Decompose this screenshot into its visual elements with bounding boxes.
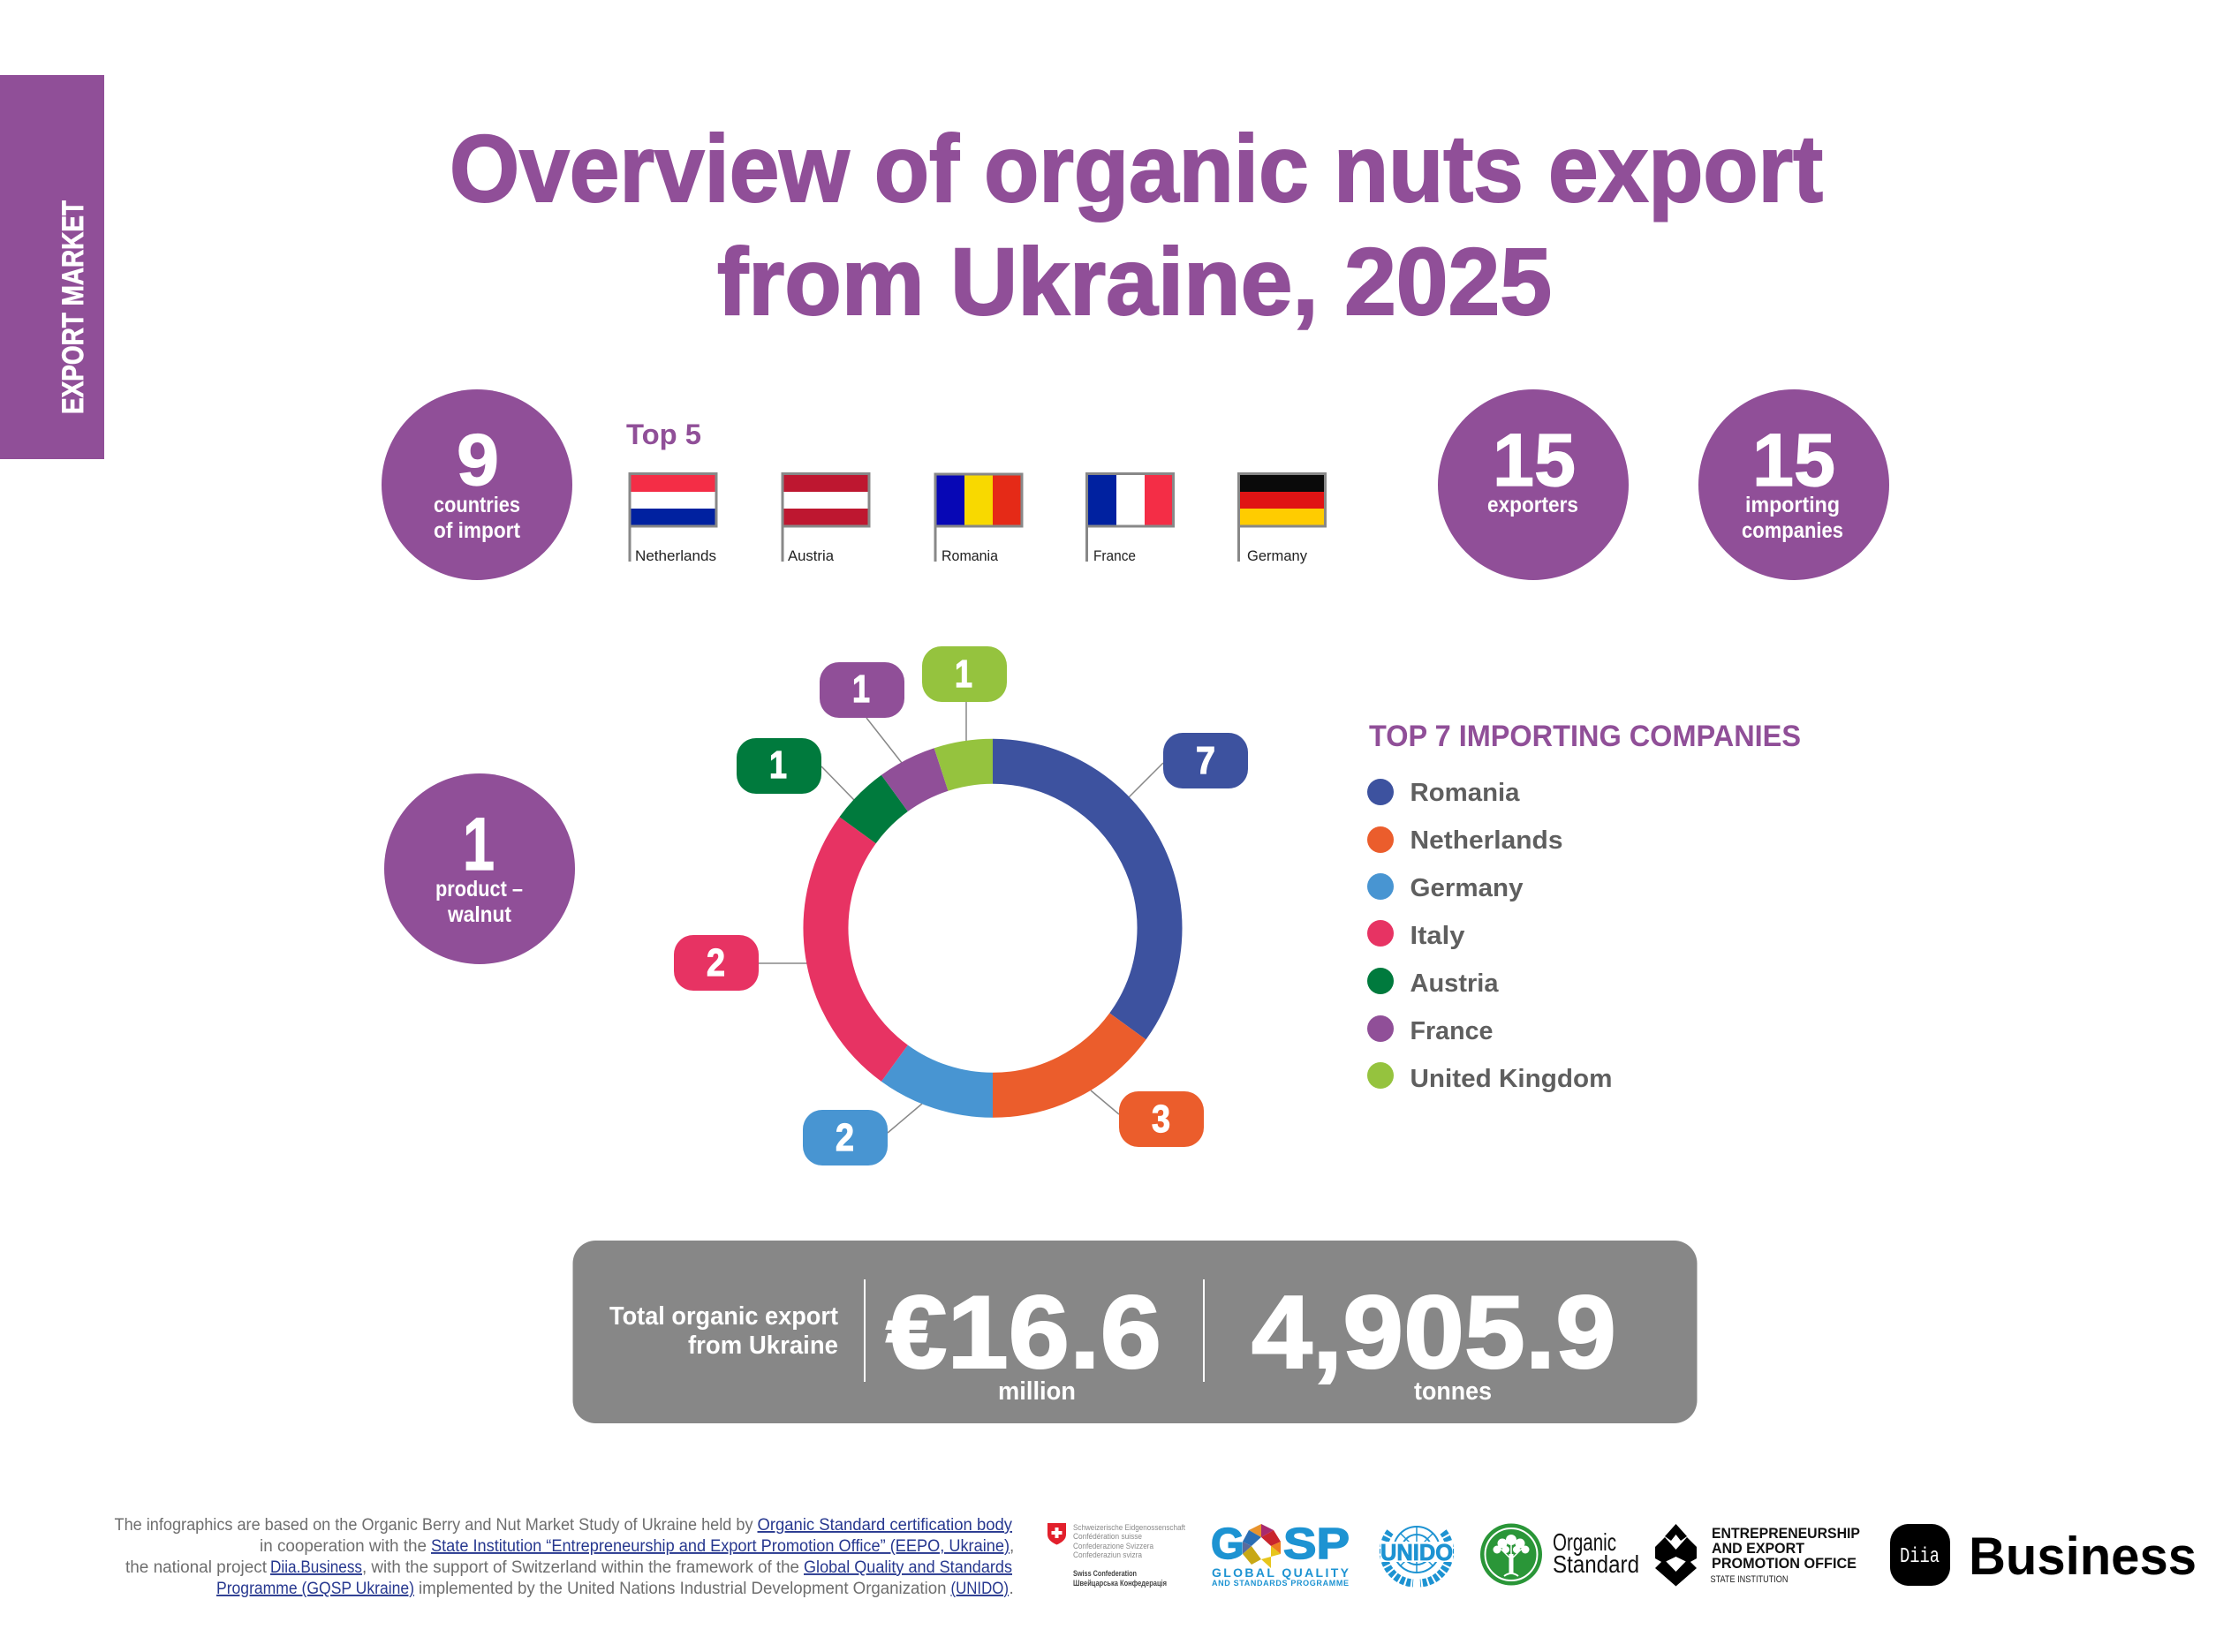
segment: Italy (826, 830, 895, 1063)
flag: Romania (935, 474, 1022, 564)
logo: Diia Business: Business (1969, 1527, 2197, 1586)
logo: Diia Business (1890, 1524, 2197, 1586)
logo: EEPO: STATE INSTITUTION (1710, 1574, 1789, 1585)
logo: GQSP: GLOBAL QUALITY (1212, 1565, 1350, 1580)
panel label: Total organic export (609, 1302, 838, 1331)
badge: Italy 2: 2 (707, 941, 725, 984)
stat circle: importing companies: companies (1742, 518, 1843, 543)
footer source note: in cooperation with the (260, 1537, 427, 1556)
logo: Swiss Confederation: Confédération suisse (1073, 1532, 1142, 1542)
flag: Germany: Germany (1247, 548, 1308, 564)
logo: Organic Standard: Standard (1553, 1550, 1639, 1578)
value: 16.6 million euro: €16.6 (886, 1274, 1161, 1390)
legend item: Italy: Italy (1410, 922, 1464, 950)
badge: United Kingdom 1: 1 (955, 653, 972, 696)
donut chart: top importing companies (826, 761, 1160, 1095)
legend item: France: France (1410, 1017, 1493, 1045)
badge: Netherlands 3: 3 (1152, 1098, 1170, 1141)
logo: EEPO (1655, 1524, 1860, 1586)
flag: France: France (1093, 548, 1136, 564)
badge: France 1: 1 (852, 668, 870, 711)
stat circle: importing companies (1698, 389, 1889, 580)
legend heading: TOP 7 IMPORTING COMPANIES (1369, 720, 1801, 753)
title: Overview of organic nuts export (450, 115, 1823, 222)
side tab: export market: EXPORT MARKET (57, 200, 90, 414)
footer source note: Programme (GQSP Ukraine) (216, 1580, 414, 1598)
footer source note: the national project (125, 1558, 268, 1577)
logo: UNIDO: UNIDO (1380, 1539, 1453, 1565)
logo: Swiss Confederation: Schweizerische Eidgenossenschaft (1073, 1523, 1185, 1533)
logo: EEPO: ENTREPRENEURSHIP (1712, 1526, 1860, 1542)
legend item: Germany (1367, 873, 1523, 902)
badge: Austria 1: 1 (769, 743, 787, 787)
title: from Ukraine, 2025 (717, 228, 1552, 335)
logo: Swiss Confederation: Швейцарська Конфедерація (1073, 1579, 1167, 1588)
footer source note: . (1009, 1580, 1014, 1598)
value: 4905.9 tonnes: 4,905.9 (1252, 1274, 1616, 1390)
stat circle: product walnut: 1 (463, 803, 495, 886)
footer source note: Organic Standard certification body (758, 1516, 1012, 1535)
logo: UNIDO (1380, 1527, 1453, 1583)
logo: EEPO: AND EXPORT (1712, 1541, 1804, 1557)
stat circle: exporters: 15 (1493, 419, 1576, 502)
logo: Swiss Confederation: Swiss Confederation (1073, 1569, 1137, 1579)
stat circle: importing companies: importing (1745, 493, 1840, 517)
badge: Germany 2 (803, 1110, 888, 1165)
total export panel (572, 1241, 1698, 1423)
logo: GQSP: SP (1283, 1520, 1350, 1568)
value: 16.6 million euro: million (998, 1377, 1076, 1406)
logo: Swiss Confederation (1047, 1523, 1185, 1588)
panel label (609, 1302, 838, 1360)
footer source note: , (1010, 1537, 1014, 1556)
footer source note: implemented by the United Nations Industrial Development Organization (419, 1580, 947, 1598)
value: 4905.9 tonnes: tonnes (1414, 1377, 1492, 1406)
side tab: export market (0, 75, 104, 459)
badge: Austria 1 (737, 738, 821, 794)
stat circle: importing companies: 15 (1752, 419, 1835, 502)
legend item: Austria: Austria (1410, 969, 1499, 998)
logo: Organic Standard (1480, 1524, 1639, 1586)
legend item: United Kingdom: United Kingdom (1410, 1065, 1613, 1093)
legend item: Romania: Romania (1410, 779, 1520, 807)
footer source note: Global Quality and Standards (804, 1558, 1012, 1577)
badge: Germany 2: 2 (836, 1116, 854, 1159)
badge: Netherlands 3 (1119, 1091, 1204, 1147)
segment: Netherlands (993, 1026, 1128, 1095)
segment: Romania (993, 761, 1160, 1026)
flag: Austria (783, 473, 869, 564)
segment: United Kingdom (942, 761, 993, 770)
footer source note: Diia.Business (270, 1558, 362, 1577)
legend item: Netherlands: Netherlands (1410, 826, 1563, 855)
flag: Netherlands: Netherlands (635, 548, 716, 564)
stat circle: product walnut: walnut (447, 902, 512, 927)
logo: Swiss Confederation: Confederaziun svizra (1073, 1550, 1143, 1560)
footer source note: The infographics are based on the Organic Berry and Nut Market Study of Ukraine held by (115, 1516, 753, 1535)
legend item: France (1367, 1015, 1493, 1045)
flag: Romania: Romania (942, 548, 999, 564)
logo: Diia Business: Diia (1900, 1545, 1940, 1569)
connector lines (759, 702, 1163, 1133)
logo: Swiss Confederation: Confederazione Svizzera (1073, 1542, 1154, 1551)
flag: Netherlands (630, 473, 716, 564)
stat circle: countries of import: countries (434, 493, 520, 517)
segment: France (895, 770, 942, 793)
flag: France (1086, 473, 1173, 564)
stat circle: product walnut: product – (435, 877, 523, 901)
legend item: Austria (1367, 968, 1499, 998)
badge: France 1 (820, 662, 904, 718)
stat circle: countries of import: of import (434, 518, 521, 543)
badge: Italy 2 (674, 935, 759, 991)
title (450, 115, 1823, 335)
footer source note (115, 1516, 1014, 1598)
logo: GQSP: AND STANDARDS PROGRAMME (1212, 1579, 1349, 1588)
stat circle: countries of import (382, 389, 572, 580)
logo: Organic Standard: Organic (1553, 1528, 1616, 1556)
logo: GQSP: G (1211, 1520, 1244, 1568)
badge: Romania 7: 7 (1196, 739, 1215, 782)
stat circle: product walnut (384, 773, 575, 964)
footer source note: , with the support of Switzerland within the framework of the (362, 1558, 799, 1577)
badge: Romania 7 (1163, 733, 1248, 788)
flag: Germany (1238, 473, 1326, 564)
segment: Austria (858, 793, 895, 830)
badge: United Kingdom 1 (922, 646, 1007, 702)
panel label: from Ukraine (688, 1331, 838, 1360)
logo: GQSP (1211, 1520, 1350, 1588)
logo: EEPO: PROMOTION OFFICE (1712, 1556, 1857, 1572)
segment: Germany (895, 1063, 993, 1095)
legend item: Germany: Germany (1410, 874, 1523, 902)
footer source note: State Institution “Entrepreneurship and Export Promotion Office” (EEPO, Ukraine) (431, 1537, 1010, 1556)
flag: Austria: Austria (788, 548, 835, 564)
heading: top 5: Top 5 (626, 419, 701, 450)
stat circle: exporters (1438, 389, 1629, 580)
stat circle: exporters: exporters (1487, 493, 1578, 517)
stat circle: countries of import: 9 (457, 419, 499, 501)
legend: top importing countries (1367, 779, 1613, 1093)
legend item: Italy (1367, 920, 1464, 950)
footer source note: (UNIDO) (950, 1580, 1009, 1598)
